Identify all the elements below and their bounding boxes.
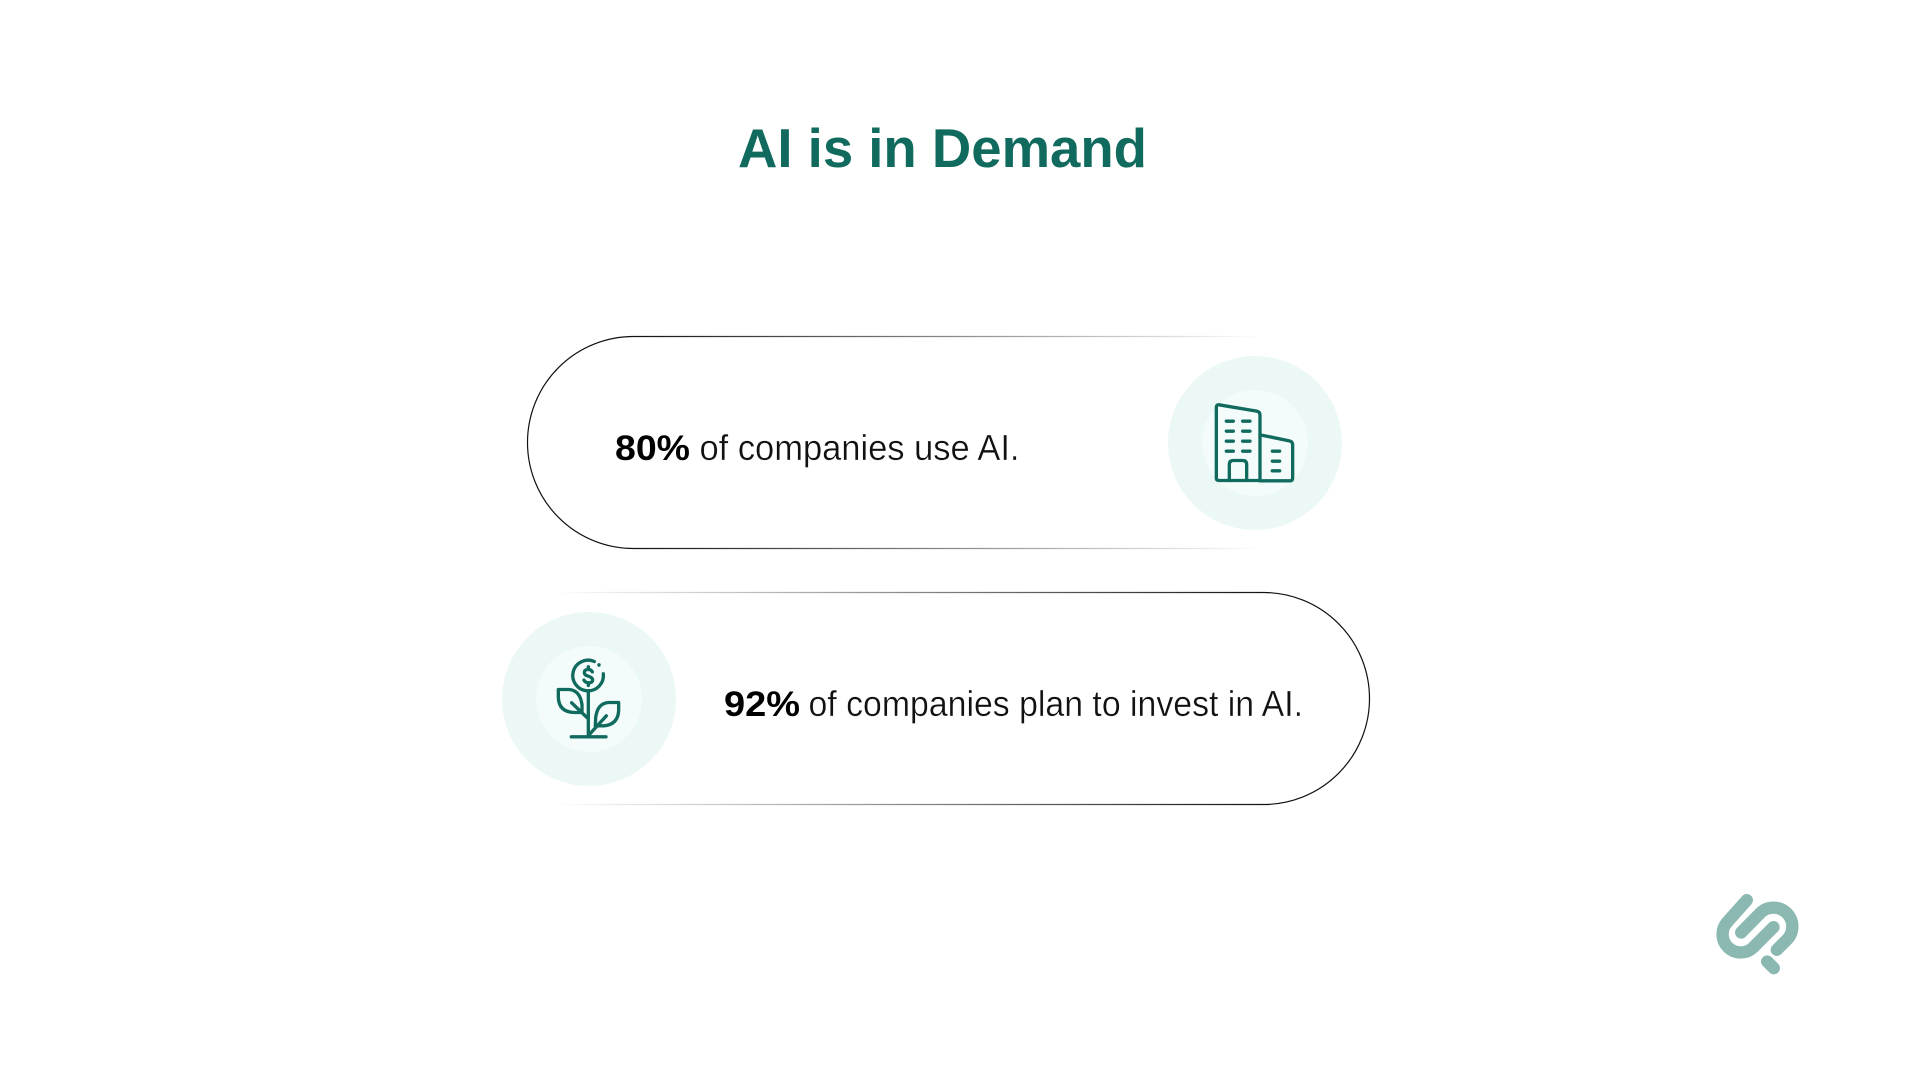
pill outline: bottom card <box>555 592 1370 804</box>
logo <box>1723 900 1792 968</box>
text: of companies plan to invest in AI: of companies plan to invest in AI. <box>808 683 1303 724</box>
title: AI is in Demand <box>738 117 1147 179</box>
stat text: 92%: 92% <box>724 685 800 724</box>
icon: money plant <box>558 660 619 737</box>
icon: office building <box>1216 405 1293 481</box>
panel: 80% of companies use AI <box>528 336 1342 548</box>
text: of companies use AI: of companies use AI. <box>700 427 1020 468</box>
icon badge: money plant <box>502 612 676 786</box>
stat text: 80%: 80% <box>615 429 690 468</box>
panel: 92% of companies plan to invest in AI <box>502 592 1370 804</box>
pill outline: top card <box>528 336 1262 548</box>
icon badge: office building <box>1168 356 1342 530</box>
